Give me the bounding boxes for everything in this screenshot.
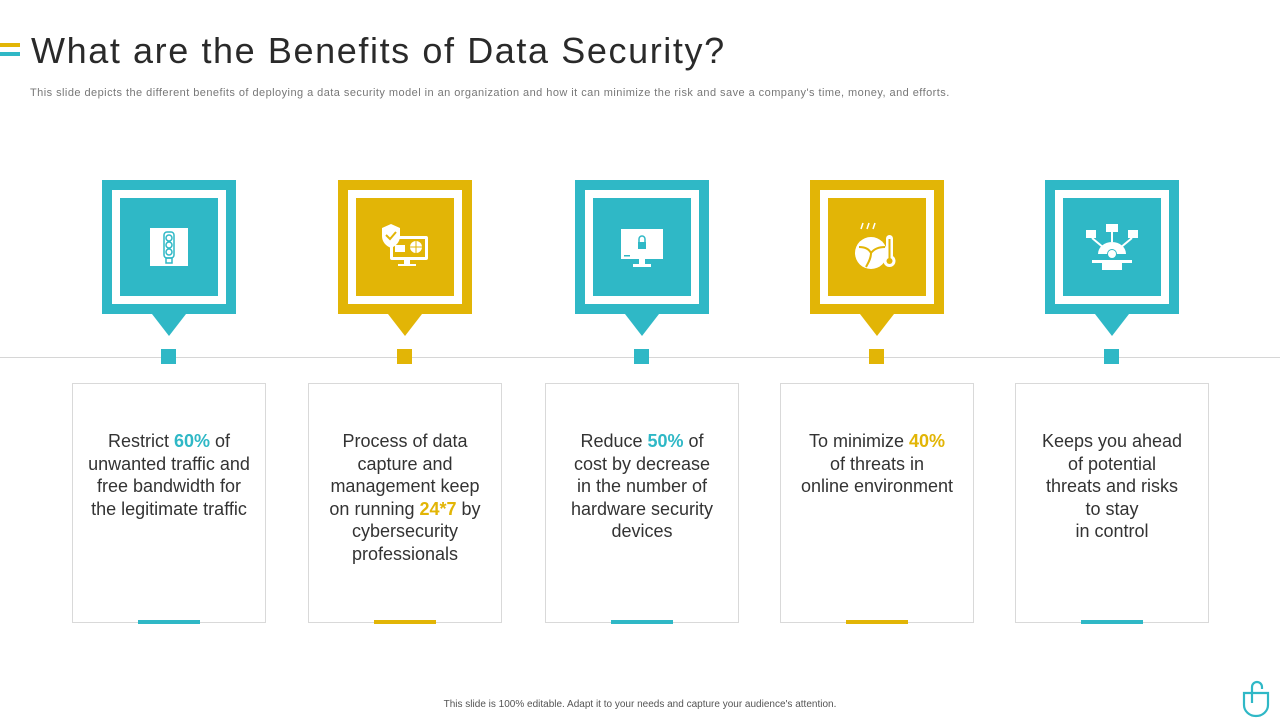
card 1: the legitimate traffic (91, 498, 247, 518)
icon frame 3: locked monitor (575, 180, 709, 314)
icon frame 5: network user (1045, 180, 1179, 314)
card 3: cost by decrease (574, 454, 710, 474)
card 5: Keeps you ahead (1042, 431, 1182, 451)
footer note: This slide is 100% editable. Adapt it to your needs and capture your audience's attention. (444, 699, 836, 710)
card 3: devices (611, 521, 673, 541)
card 1 (72, 383, 266, 623)
card 4: To minimize 40% (809, 431, 945, 451)
card 3: hardware security (571, 498, 713, 518)
title: What are the Benefits of Data Security? (31, 30, 726, 71)
icon frame 1: traffic light (102, 180, 236, 314)
card 5: of potential (1068, 454, 1156, 474)
card 4: of threats in (830, 454, 924, 474)
card 5: in control (1075, 521, 1149, 541)
card 2: Process of data (342, 431, 468, 451)
card 5 (1015, 383, 1209, 623)
card 2 (308, 383, 502, 623)
card 5: to stay (1085, 498, 1139, 518)
card 2: capture and (357, 454, 453, 474)
timeline markers (161, 349, 176, 364)
card 3: Reduce 50% of (580, 431, 704, 451)
card 2: on running 24*7 by (329, 498, 481, 518)
card 2: cybersecurity (352, 521, 458, 541)
icon frame 4: earth thermometer (810, 180, 944, 314)
subtitle: This slide depicts the different benefits of deploying a data security model in an organization and how it can minimize the risk and save a company's time, money, and efforts. (30, 87, 950, 99)
card 2: management keep (330, 476, 480, 496)
card 1: Restrict 60% of (108, 431, 230, 451)
card 1: free bandwidth for (97, 476, 241, 496)
icon frame 2: shield monitor (338, 180, 472, 314)
card 2: professionals (352, 544, 458, 564)
title accent (0, 43, 20, 56)
card 5: threats and risks (1046, 476, 1178, 496)
card 3 (545, 383, 739, 623)
card 1: unwanted traffic and (88, 454, 250, 474)
card 4 (780, 383, 974, 623)
card 3: in the number of (577, 476, 707, 496)
timeline line (0, 357, 1280, 358)
card 4: online environment (801, 476, 953, 496)
icon: logo lock (1242, 680, 1270, 718)
